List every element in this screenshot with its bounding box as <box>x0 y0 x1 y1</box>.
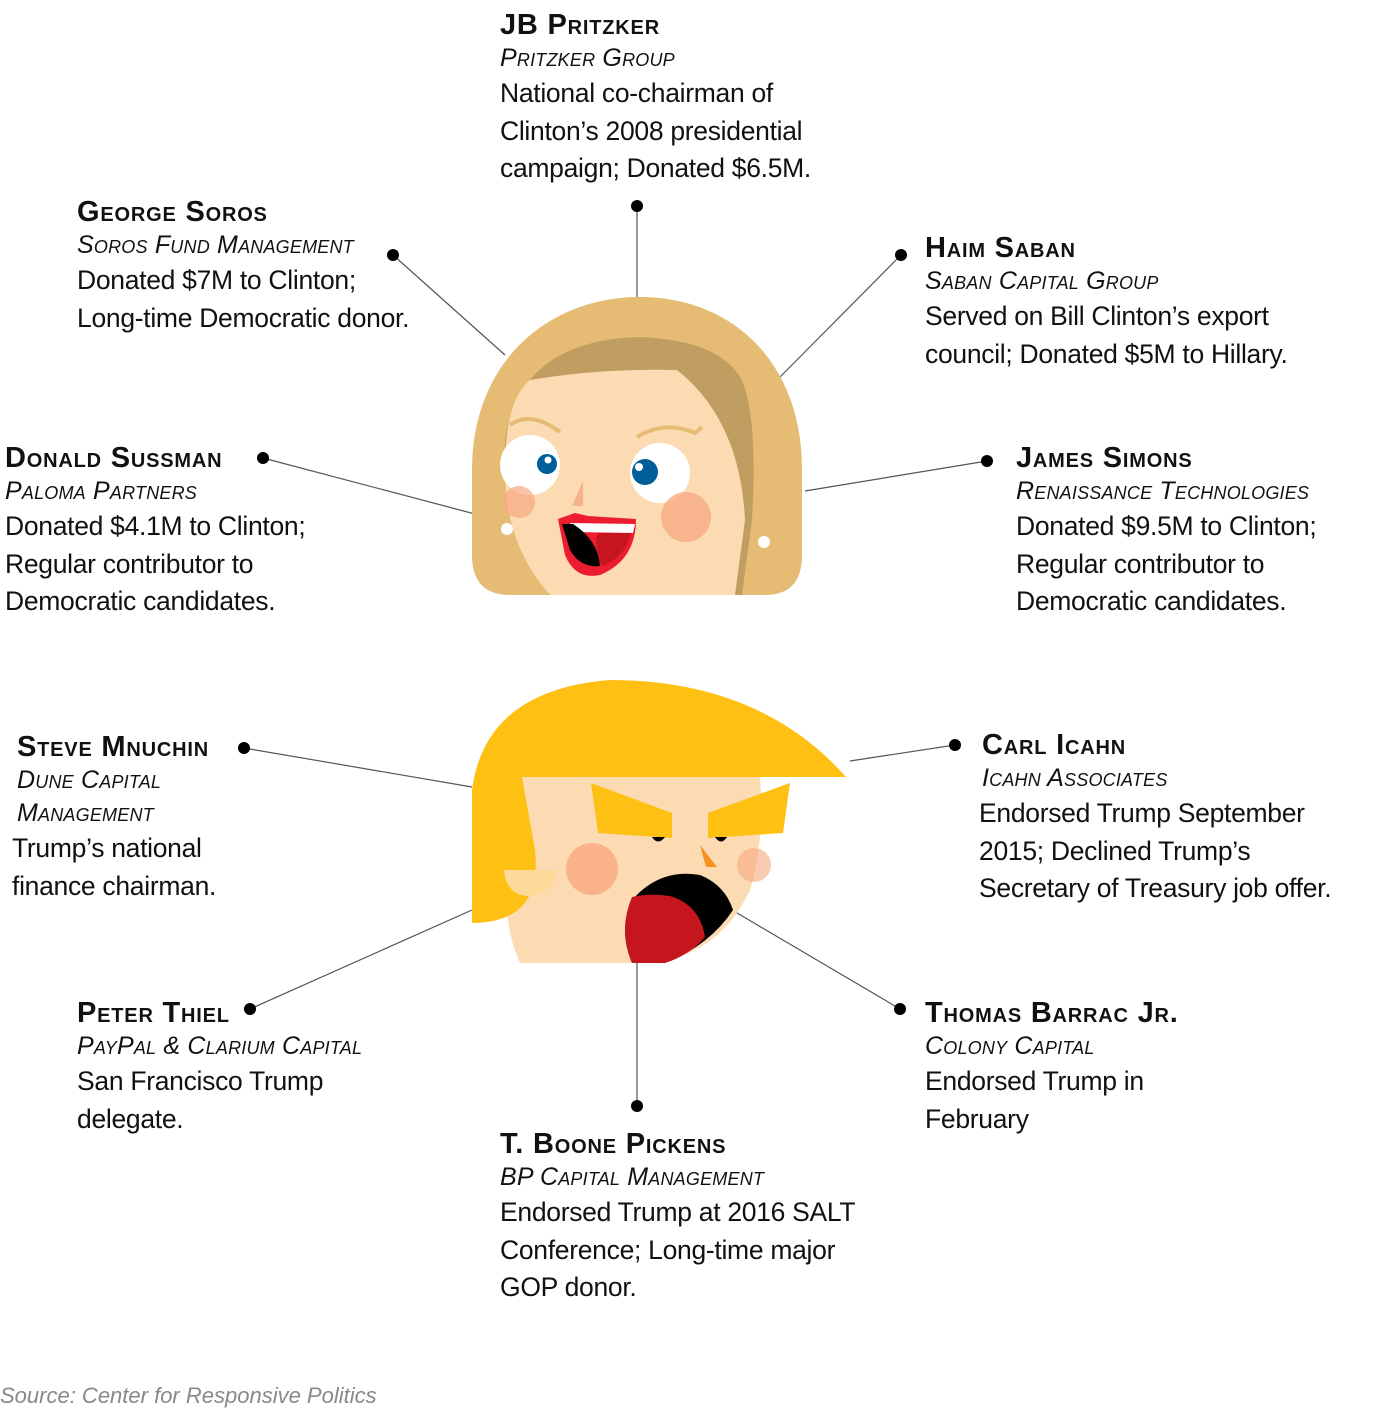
text: Haim Saban <box>925 232 1288 368</box>
text: James Simons: Renaissance Technologies <box>1016 477 1309 505</box>
text: T. Boone Pickens: BP Capital Management <box>500 1163 764 1191</box>
text: James Simons: James Simons <box>1016 442 1192 474</box>
text: Donald Sussman: Paloma Partners <box>5 477 197 505</box>
text: JB Pritzker: Pritzker Group <box>500 44 675 72</box>
text: James Simons: Donated $9.5M to Clinton; <box>1016 511 1316 541</box>
text: Thomas Barrac Jr.: Colony Capital <box>925 1032 1095 1060</box>
text: James Simons <box>1016 442 1316 616</box>
text: T. Boone Pickens <box>500 1128 855 1302</box>
text: T. Boone Pickens: GOP donor. <box>500 1272 636 1302</box>
text: Carl Icahn: 2015; Declined Trump’s <box>979 836 1250 866</box>
text: Haim Saban: Served on Bill Clinton’s export <box>925 301 1269 331</box>
text: Peter Thiel: PayPal & Clarium Capital <box>77 1032 362 1060</box>
text: JB Pritzker: Clinton’s 2008 presidential <box>500 116 802 146</box>
text: Carl Icahn <box>979 729 1331 903</box>
text: George Soros: Donated $7M to Clinton; <box>77 265 356 295</box>
text: Haim Saban: Haim Saban <box>925 232 1076 264</box>
dots <box>238 200 993 1112</box>
text: Steve Mnuchin: finance chairman. <box>12 870 216 900</box>
text: JB Pritzker: National co-chairman of <box>500 78 773 108</box>
text: Steve Mnuchin <box>12 731 216 900</box>
text: Carl Icahn: Icahn Associates <box>982 764 1168 792</box>
text: Donald Sussman: Donald Sussman <box>5 442 222 474</box>
text: Steve Mnuchin: Steve Mnuchin <box>17 731 209 763</box>
text: T. Boone Pickens: T. Boone Pickens <box>500 1128 726 1160</box>
text: Donald Sussman: Regular contributor to <box>5 548 253 578</box>
text: Haim Saban: Saban Capital Group <box>925 267 1159 295</box>
text: JB Pritzker: JB Pritzker <box>500 9 660 41</box>
text: Donald Sussman: Donated $4.1M to Clinton; <box>5 511 305 541</box>
text: Peter Thiel: San Francisco Trump <box>77 1066 323 1096</box>
text: Thomas Barrac Jr.: Thomas Barrac Jr. <box>925 997 1179 1029</box>
text: Steve Mnuchin: Dune Capital <box>17 766 161 794</box>
text: George Soros: Soros Fund Management <box>77 231 354 259</box>
text: James Simons: Democratic candidates. <box>1016 586 1286 616</box>
text: George Soros <box>77 196 409 332</box>
text: Thomas Barrac Jr. <box>925 997 1179 1134</box>
text: JB Pritzker <box>500 9 811 183</box>
text: Carl Icahn: Endorsed Trump September <box>979 798 1305 828</box>
text: Steve Mnuchin: Trump’s national <box>12 833 202 863</box>
icon: Trump face <box>472 680 846 963</box>
text: Thomas Barrac Jr.: Endorsed Trump in <box>925 1066 1144 1096</box>
text: T. Boone Pickens: Endorsed Trump at 2016 SALT <box>500 1197 855 1227</box>
text: T. Boone Pickens: Conference; Long-time major <box>500 1234 835 1264</box>
icon: Clinton face <box>472 297 802 595</box>
text: Peter Thiel: delegate. <box>77 1104 183 1134</box>
text: Peter Thiel <box>77 997 362 1134</box>
connector lines <box>244 206 987 1106</box>
text: Carl Icahn: Secretary of Treasury job offer. <box>979 873 1331 903</box>
text: George Soros: George Soros <box>77 196 268 228</box>
text: James Simons: Regular contributor to <box>1016 548 1264 578</box>
text: George Soros: Long-time Democratic donor. <box>77 302 409 332</box>
text: Carl Icahn: Carl Icahn <box>982 729 1126 761</box>
text: Thomas Barrac Jr.: February <box>925 1104 1029 1134</box>
source: Source: Center for Responsive Politics <box>0 1383 377 1408</box>
text: Haim Saban: council; Donated $5M to Hillary. <box>925 338 1288 368</box>
text: Donald Sussman: Democratic candidates. <box>5 586 275 616</box>
text: Peter Thiel: Peter Thiel <box>77 997 230 1029</box>
text: Steve Mnuchin: Management <box>17 799 154 827</box>
text: JB Pritzker: campaign; Donated $6.5M. <box>500 153 811 183</box>
text: Donald Sussman <box>5 442 305 616</box>
